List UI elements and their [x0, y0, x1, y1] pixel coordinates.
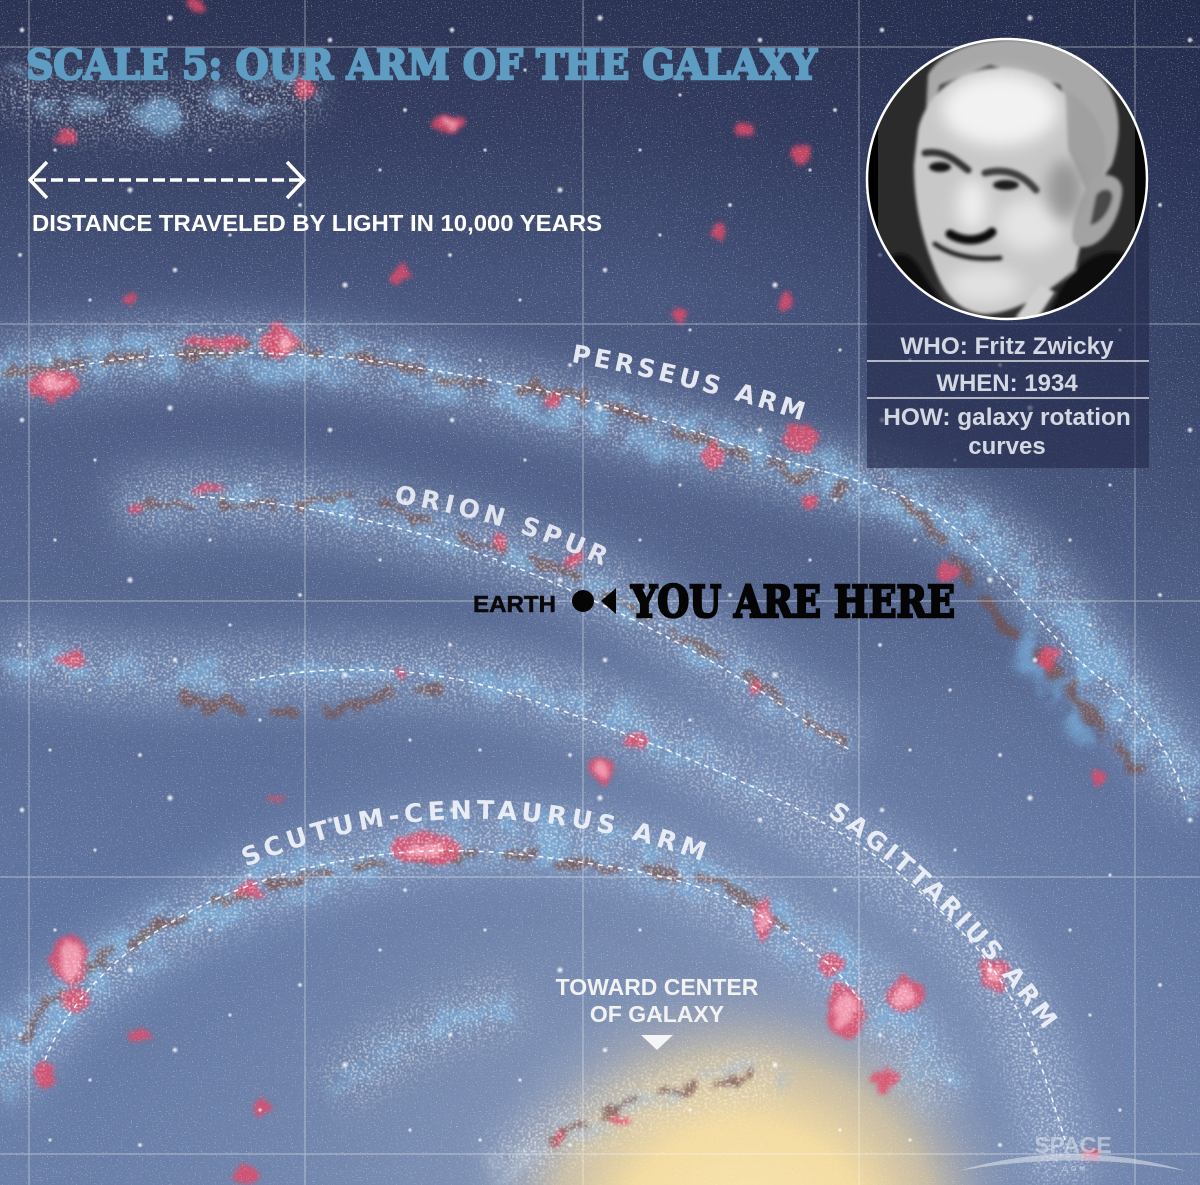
nose shadow	[950, 232, 992, 240]
cheek highlight	[998, 199, 1062, 251]
toward center label	[556, 974, 759, 1050]
Earth dot	[572, 590, 594, 612]
left arrowhead	[30, 162, 47, 198]
down arrow	[641, 1035, 673, 1050]
Earth label: EARTH	[473, 591, 556, 617]
inner arm crossing bulge	[490, 1070, 790, 1175]
label: Orion Spur: ORION SPUR	[396, 486, 606, 566]
pointer triangle	[601, 588, 616, 614]
panel background	[867, 180, 1149, 468]
label: Scutum-Centaurus Arm: SCUTUM-CENTAURUS ARM	[242, 800, 706, 866]
arm trace dashed lines	[45, 353, 1185, 1140]
logo suffix: .COM	[1058, 1166, 1088, 1173]
label line one: TOWARD CENTER	[556, 974, 759, 1000]
darkened upper-right sky	[806, 0, 1200, 621]
portrait ring	[867, 39, 1147, 319]
left eye	[929, 162, 951, 172]
when: WHEN: 1934	[936, 370, 1078, 397]
forehead highlights	[942, 74, 1058, 146]
logo wordmark: SPACE	[1034, 1132, 1112, 1158]
central bulge	[420, 950, 1200, 1185]
portrait of Fritz Zwicky	[866, 38, 1148, 320]
chin highlight	[949, 267, 1021, 303]
shadow near temple	[1047, 160, 1083, 220]
label: Perseus Arm: PERSEUS ARM	[573, 344, 806, 420]
how continued: curves	[968, 433, 1046, 460]
Earth marker	[473, 577, 955, 628]
hair and head shapes	[892, 40, 1124, 318]
logo swoosh	[958, 1154, 1186, 1171]
left eyebrow	[925, 152, 968, 170]
title: SCALE 5: OUR ARM OF THE GALAXY	[26, 41, 818, 89]
label: Sagittarius Arm: SAGITTARIUS ARM	[829, 803, 1058, 1028]
how: HOW: galaxy rotation	[883, 404, 1131, 431]
info panel	[867, 180, 1149, 468]
nose highlight	[957, 179, 987, 231]
right eye	[993, 180, 1019, 190]
space.com logo	[958, 1132, 1186, 1173]
photo backdrop	[878, 40, 1135, 318]
right black edge	[1135, 126, 1146, 232]
scale caption: DISTANCE TRAVELED BY LIGHT IN 10,000 YEARS	[32, 210, 602, 236]
right arrowhead	[287, 162, 304, 198]
right eyebrow	[985, 171, 1036, 190]
mouth	[935, 244, 1000, 259]
portrait image area	[868, 40, 1146, 318]
spiral arm glow	[0, 352, 1200, 1185]
who: WHO: Fritz Zwicky	[900, 333, 1114, 360]
panel dividers	[867, 361, 1149, 398]
dust lanes	[5, 349, 1140, 1140]
scale arrow	[30, 162, 304, 198]
you are here: YOU ARE HERE	[630, 577, 955, 628]
left black edge	[868, 128, 878, 230]
dashed shaft	[34, 178, 302, 182]
bright pink cores	[41, 120, 1003, 1028]
label line two: OF GALAXY	[590, 1001, 724, 1027]
